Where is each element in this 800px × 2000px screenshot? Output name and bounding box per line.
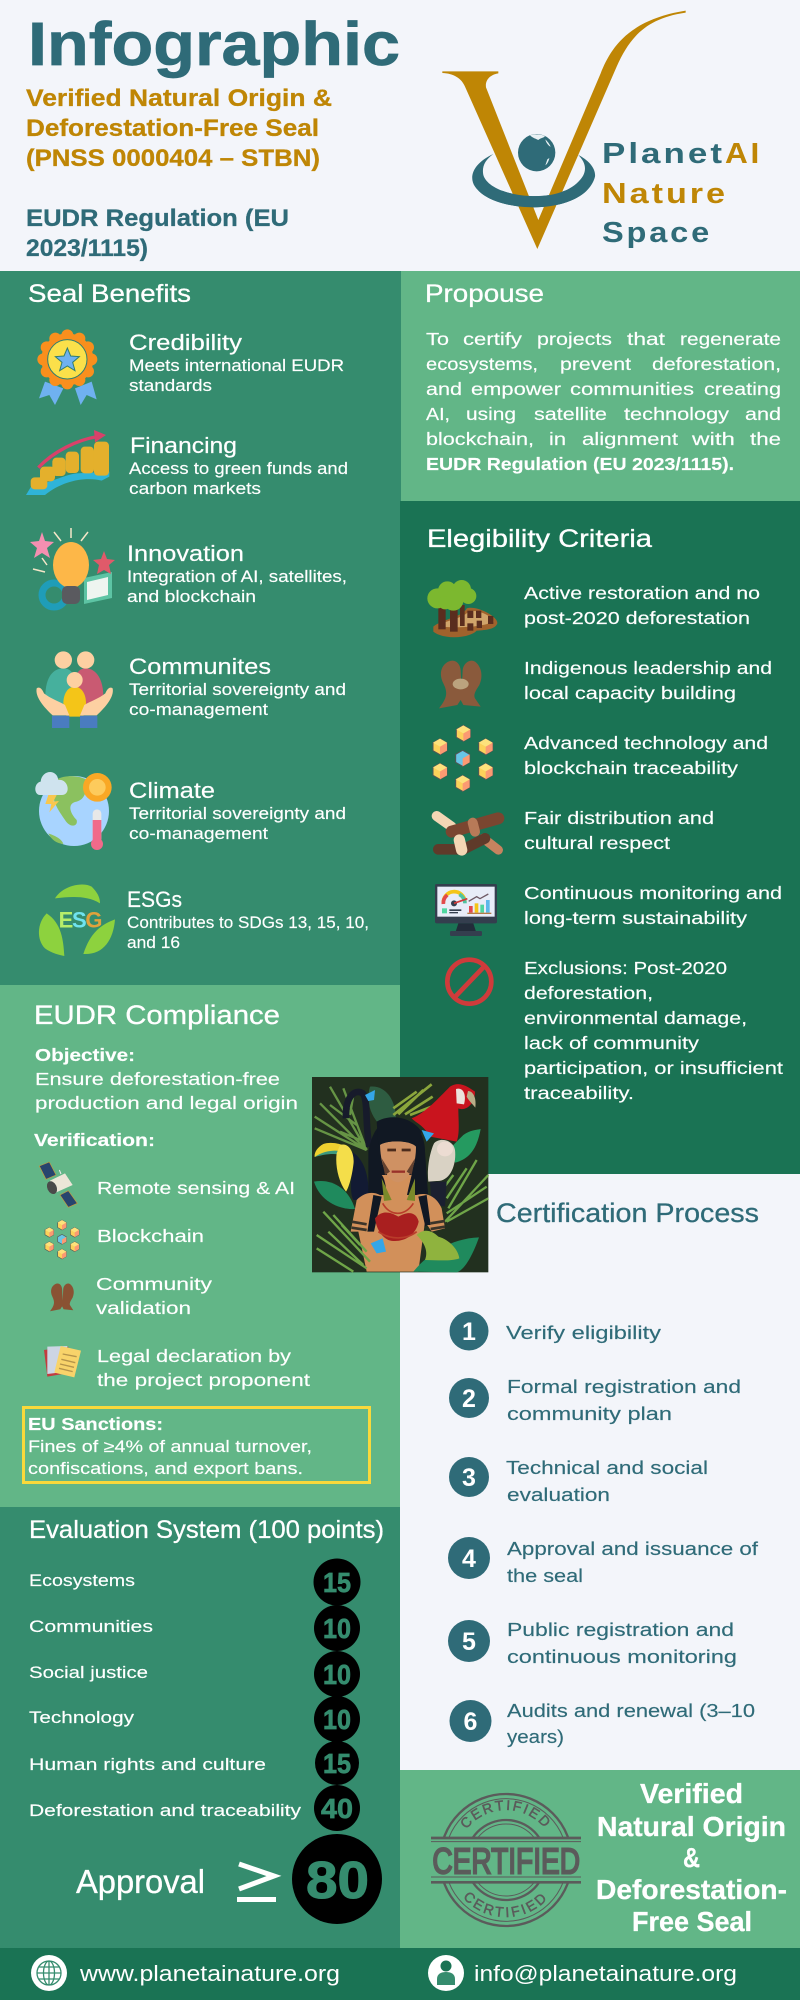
purpose paragraph: and: [426, 379, 462, 399]
purpose paragraph: with: [691, 429, 735, 449]
objective: production and legal origin: [35, 1093, 298, 1113]
objective: Objective:: [35, 1045, 135, 1065]
regulation reference: 2023/1115): [26, 235, 148, 262]
illustration: indigenous woman with rainforest wildlife: [312, 1077, 488, 1272]
logo wordmark: Space: [602, 217, 712, 249]
criterion: restoration: post-2020 deforestation: [524, 608, 750, 628]
subtitle: seal name: [26, 85, 332, 172]
purpose paragraph: in: [549, 429, 566, 449]
icon: climate earth: [35, 772, 112, 850]
criterion: restoration: [524, 583, 760, 628]
score row: technology: [29, 1696, 360, 1742]
score row: deforestation: [29, 1785, 360, 1831]
benefit: innovation: and blockchain: [127, 588, 256, 606]
panel: eligibility criteria: [400, 501, 800, 1174]
verification: legal declaration: Legal declaration by: [97, 1346, 291, 1366]
benefit: credibility: standards: [129, 377, 212, 395]
seal name: Deforestation-: [596, 1874, 787, 1905]
score row: human rights: Human rights and culture: [29, 1756, 266, 1774]
step 5: Public registration and: [507, 1619, 734, 1640]
seal name: Natural Origin: [597, 1811, 786, 1842]
header: [26, 10, 762, 262]
score row: social justice: 10: [323, 1659, 351, 1690]
objective: [35, 1045, 298, 1113]
icon: hands holding soil: [439, 661, 481, 708]
benefit: climate: Climate: [129, 778, 215, 803]
step 3: [449, 1457, 708, 1505]
step 2: [449, 1376, 741, 1424]
benefit: financing: Financing: [130, 433, 237, 458]
panel: evaluation system: [0, 1507, 400, 1948]
title: Infographic: [28, 10, 400, 78]
benefit: climate: co-management: [129, 825, 268, 843]
purpose paragraph: EUDR Regulation (EU 2023/1115).: [426, 454, 734, 474]
seal name: Free Seal: [632, 1906, 752, 1937]
benefit: ESGs: ESGs: [127, 887, 182, 912]
purpose paragraph: prevent: [560, 354, 631, 374]
purpose paragraph: projects: [537, 329, 612, 349]
icon: certified stamp: CERTIFIED: [432, 1840, 580, 1881]
score row: ecosystems: [29, 1558, 360, 1606]
heading: EUDR compliance: EUDR Compliance: [34, 1000, 280, 1030]
criterion: technology: [524, 733, 768, 778]
regulation reference: [26, 205, 289, 262]
purpose paragraph: certify: [463, 329, 522, 349]
icon: blockchain cubes: [433, 725, 493, 791]
callout: EU sanctions: [24, 1408, 370, 1482]
seal name: [596, 1778, 787, 1937]
step 1: Verify eligibility: [506, 1322, 662, 1343]
seal name: Verified: [640, 1778, 743, 1809]
score row: social justice: Social justice: [29, 1664, 148, 1682]
purpose paragraph: AI,: [426, 404, 450, 424]
step 2: community plan: [507, 1403, 672, 1424]
panel: purpose: [401, 271, 800, 501]
score row: communities: [29, 1605, 360, 1651]
purpose paragraph: alignment: [582, 429, 678, 449]
benefit: credibility: Credibility: [129, 330, 243, 355]
callout: EU sanctions: EU Sanctions:: [28, 1414, 163, 1434]
benefit: innovation: [127, 541, 347, 606]
criterion: indigenous leadership: [524, 658, 772, 703]
benefit: credibility: Meets international EUDR: [129, 357, 344, 375]
benefit: credibility: [129, 330, 344, 395]
criterion: exclusions: lack of community: [524, 1033, 699, 1053]
logo wordmark: Nature: [602, 178, 728, 210]
purpose paragraph: blockchain,: [426, 429, 534, 449]
purpose paragraph: using: [466, 404, 516, 424]
benefit: communities: Territorial sovereignty and: [129, 681, 346, 699]
purpose paragraph: regenerate: [680, 329, 781, 349]
purpose paragraph: and: [745, 404, 781, 424]
heading: seal benefits: Seal Benefits: [28, 280, 191, 308]
benefit: innovation: Innovation: [127, 541, 244, 566]
criterion: indigenous leadership: local capacity building: [524, 683, 736, 703]
icon: ESG leaves: S: [72, 907, 87, 932]
purpose paragraph: creating: [704, 379, 781, 399]
criterion: exclusions: deforestation,: [524, 983, 653, 1003]
criterion: fair distribution: [524, 808, 714, 853]
score row: human rights: 15: [323, 1748, 351, 1779]
subtitle: seal name: Verified Natural Origin &: [26, 85, 332, 112]
criterion: exclusions: traceability.: [524, 1083, 634, 1103]
heading: elegibility criteria: Elegibility Criteria: [427, 525, 652, 553]
verification: legal declaration: the project proponent: [97, 1370, 310, 1390]
purpose paragraph: To: [426, 329, 449, 349]
icon: monitoring screen: [435, 884, 497, 936]
icon: certified stamp: [431, 1792, 581, 1928]
icon: prohibition sign: [447, 960, 491, 1004]
icon: V with globe and orbit: [442, 11, 686, 249]
step 6: years): [507, 1726, 564, 1747]
benefit: financing: Access to green funds and: [129, 460, 348, 478]
icon: medal: [37, 329, 97, 405]
purpose paragraph: that: [627, 329, 665, 349]
step 4: Approval and issuance of: [507, 1538, 759, 1559]
icon: hands small: [50, 1284, 74, 1311]
criterion: monitoring: [524, 883, 782, 928]
benefit: financing: carbon markets: [129, 480, 261, 498]
website: www.planetainature.org: [79, 1961, 340, 1986]
criterion: exclusions: environmental damage,: [524, 1008, 747, 1028]
step 2: Formal registration and: [507, 1376, 741, 1397]
benefit: communities: [129, 654, 346, 719]
step 5: 5: [462, 1628, 476, 1656]
benefit: ESGs: Contributes to SDGs 13, 15, 10,: [127, 914, 369, 932]
score row: human rights: [29, 1741, 359, 1785]
objective: Ensure deforestation-free: [35, 1069, 280, 1089]
step 3: evaluation: [507, 1484, 610, 1505]
purpose paragraph: communities: [570, 379, 694, 399]
step 6: [450, 1700, 755, 1747]
icon: certified stamp: CERTIFIED: [464, 1892, 546, 1918]
icon: trees and stumps: [427, 580, 497, 637]
verification: community validation: validation: [96, 1298, 191, 1318]
logo wordmark: AI: [725, 138, 762, 170]
step 4: [448, 1537, 759, 1586]
purpose paragraph: technology: [624, 404, 729, 424]
icon: interlocked arms: [437, 816, 498, 850]
approval threshold: Approval: [76, 1863, 205, 1900]
step 4: the seal: [507, 1565, 583, 1586]
logo wordmark: Planet: [602, 138, 725, 170]
step 6: 6: [464, 1708, 477, 1736]
score row: communities: 10: [323, 1613, 351, 1644]
criterion: monitoring: Continuous monitoring and: [524, 883, 782, 903]
criterion: exclusions: participation, or insufficient: [524, 1058, 783, 1078]
panel: seal: [400, 1770, 800, 1948]
panel: EUDR compliance: [0, 985, 400, 1507]
purpose paragraph: ecosystems,: [426, 354, 538, 374]
step 3: 3: [462, 1464, 476, 1492]
criterion: indigenous leadership: Indigenous leadership and: [524, 658, 772, 678]
email: info@planetainature.org: [474, 1961, 737, 1986]
verification: blockchain: Blockchain: [97, 1226, 204, 1246]
score row: social justice: [29, 1651, 360, 1697]
icon: globe: [31, 1955, 67, 1991]
step 5: continuous monitoring: [507, 1646, 737, 1667]
benefit: financing: [129, 433, 348, 498]
benefit: climate: Territorial sovereignty and: [129, 805, 346, 823]
benefit: communities: Communites: [129, 654, 271, 679]
subtitle: seal name: (PNSS 0000404 – STBN): [26, 145, 320, 172]
callout: EU sanctions: confiscations, and export bans.: [28, 1460, 303, 1478]
benefit: ESGs: [127, 887, 369, 952]
icon: certified stamp: CERTIFIED: [461, 1800, 550, 1828]
step 2: 2: [462, 1385, 476, 1413]
purpose paragraph: the: [750, 429, 781, 449]
purpose paragraph: deforestation,: [652, 354, 781, 374]
icon: ESG leaves: [39, 884, 115, 956]
logo: PlanetAI Nature Space: [442, 11, 762, 249]
verification heading: Verification:: [34, 1130, 155, 1150]
benefit: innovation: Integration of AI, satellites,: [127, 568, 347, 586]
approval threshold: 80: [306, 1852, 369, 1910]
icon: light bulb: [30, 528, 115, 607]
icon: blockchain small: [45, 1220, 79, 1259]
subtitle: seal name: Deforestation-Free Seal: [26, 115, 319, 142]
icon: person: [428, 1955, 464, 1991]
purpose paragraph: satellite: [534, 404, 607, 424]
benefit: climate: [129, 778, 346, 843]
heading: propouse: Propouse: [425, 280, 544, 308]
benefit: communities: co-management: [129, 701, 268, 719]
score row: technology: 10: [323, 1704, 351, 1735]
score row: ecosystems: 15: [323, 1567, 351, 1598]
criterion: monitoring: long-term sustainability: [524, 908, 747, 928]
criterion: fair distribution: cultural respect: [524, 833, 670, 853]
criterion: exclusions: [524, 958, 783, 1103]
icon: community in hands: [36, 651, 113, 728]
step 4: 4: [462, 1545, 476, 1573]
criterion: technology: blockchain traceability: [524, 758, 738, 778]
step 3: Technical and social: [506, 1457, 708, 1478]
criterion: restoration: Active restoration and no: [524, 583, 760, 603]
callout: EU sanctions: Fines of ≥4% of annual turnover,: [28, 1438, 312, 1456]
regulation reference: EUDR Regulation (EU: [26, 205, 289, 232]
step 1: 1: [462, 1318, 476, 1346]
icon: coin stacks: [26, 430, 109, 495]
icon: satellite: [39, 1162, 77, 1207]
seal name: &: [683, 1842, 700, 1873]
step 6: Audits and renewal (3–10: [507, 1700, 755, 1721]
score row: ecosystems: Ecosystems: [29, 1572, 135, 1590]
approval threshold: [76, 1834, 382, 1924]
purpose paragraph: empower: [471, 379, 561, 399]
benefit: ESGs: and 16: [127, 934, 180, 952]
verification: community validation: [96, 1274, 212, 1318]
panel: seal benefits: [0, 271, 401, 985]
verification: legal declaration: [97, 1346, 310, 1390]
score row: technology: Technology: [29, 1709, 135, 1727]
step 5: [448, 1619, 737, 1667]
step 1: [450, 1312, 662, 1350]
logo wordmark: [602, 138, 762, 249]
heading: evaluation system: Evaluation System (100 points): [29, 1516, 384, 1544]
verification: community validation: Community: [96, 1274, 212, 1294]
score row: deforestation: Deforestation and traceability: [29, 1802, 302, 1820]
panel: certification process: [400, 1174, 800, 1770]
icon: documents: [44, 1346, 81, 1377]
icon: ESG leaves: G: [85, 907, 102, 932]
heading: certification process: Certification Process: [496, 1198, 759, 1228]
footer: [0, 1948, 800, 2000]
criterion: exclusions: Exclusions: Post-2020: [524, 958, 727, 978]
icon: ESG leaves: E: [59, 907, 73, 932]
purpose paragraph: [426, 329, 781, 474]
score row: communities: Communities: [29, 1618, 153, 1636]
criterion: technology: Advanced technology and: [524, 733, 768, 753]
score row: deforestation: 40: [321, 1793, 353, 1824]
verification: remote sensing: Remote sensing & AI: [97, 1178, 295, 1198]
criterion: fair distribution: Fair distribution and: [524, 808, 714, 828]
